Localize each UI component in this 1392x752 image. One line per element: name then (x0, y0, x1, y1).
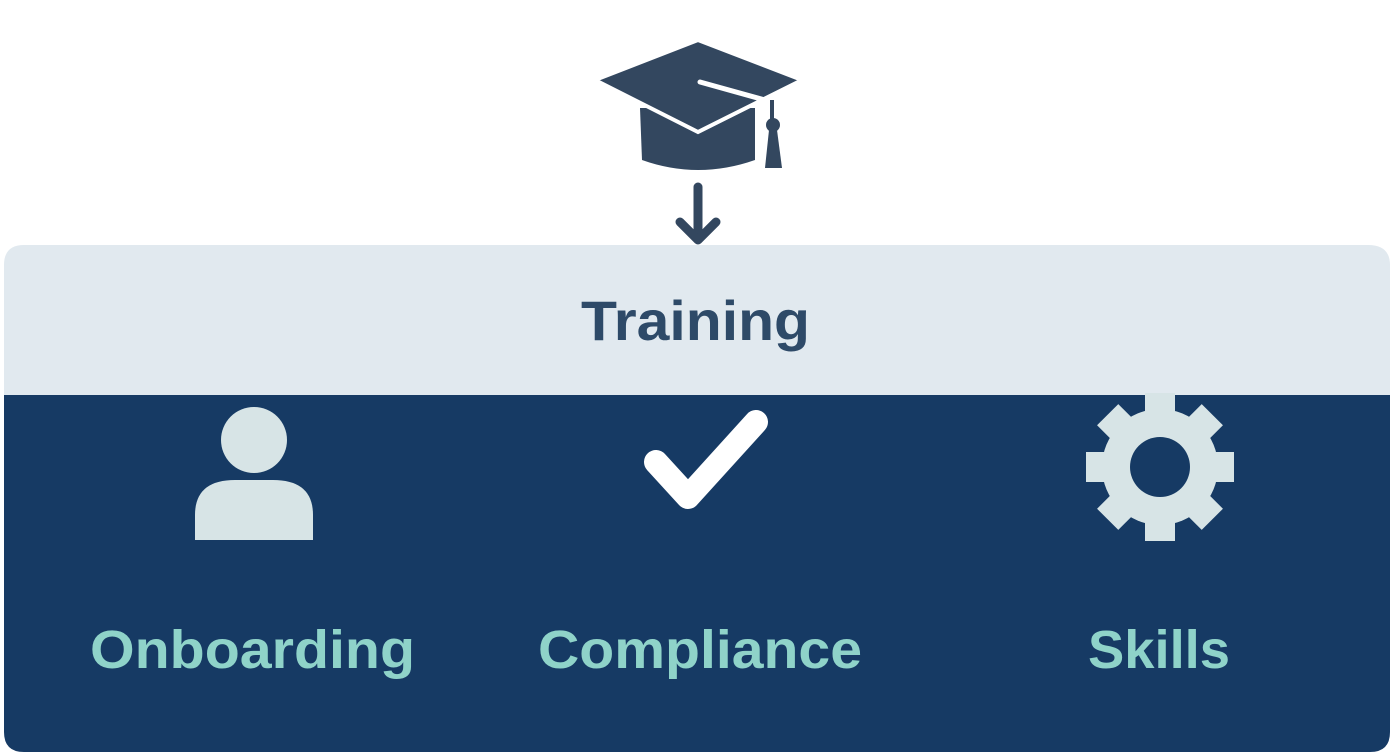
icon: gear (1086, 393, 1234, 541)
label: Compliance: Compliance (538, 620, 862, 680)
label: Onboarding: Onboarding (90, 620, 415, 680)
icon: person (195, 407, 313, 540)
icon: graduation cap (595, 40, 802, 170)
arrow: down (680, 187, 716, 240)
panel: training (4, 245, 1390, 752)
label: Skills: Skills (1088, 620, 1230, 680)
icon: checkmark (656, 422, 756, 497)
heading: Training: Training (581, 289, 810, 352)
